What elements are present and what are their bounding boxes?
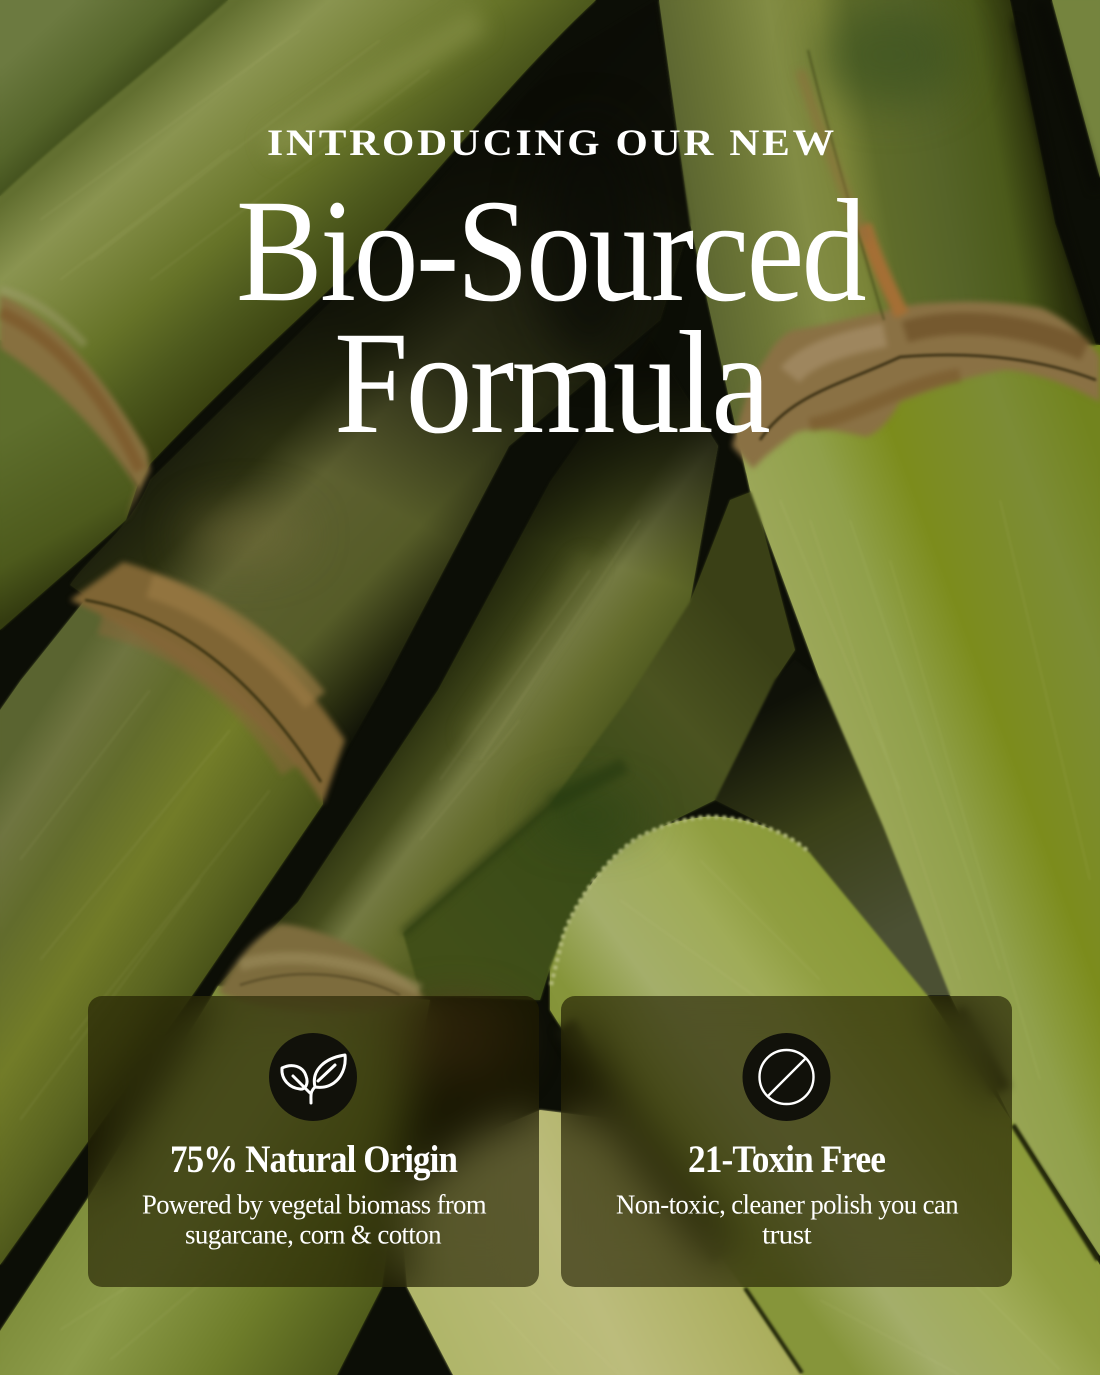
colour patches	[185, 5, 960, 1074]
card text: trust	[762, 1220, 812, 1250]
node: left centre	[70, 562, 345, 804]
title: Bio-Sourced Formula: Bio-Sourced	[236, 169, 865, 332]
shadow: mid cane top	[218, 340, 718, 996]
panel: 21-toxin free	[561, 996, 1012, 1287]
title: Bio-Sourced Formula	[236, 169, 865, 464]
cane: top-left corner	[0, 0, 228, 196]
cane: dark back	[715, 660, 950, 995]
cane: right large upper	[659, 0, 1100, 473]
cane: lower left	[0, 600, 323, 1265]
cane: mid light	[218, 340, 718, 996]
cane: front cut	[550, 817, 1100, 1375]
cane: top-left large	[0, 0, 596, 487]
title: Bio-Sourced Formula: Formula	[334, 301, 770, 464]
cane: mid right	[403, 491, 795, 1000]
highlights	[270, 20, 590, 740]
card text	[142, 1190, 487, 1250]
cane: bottom left	[0, 986, 430, 1375]
seam: thin dark lines	[745, 1125, 1098, 1373]
cane: top right corner	[1052, 0, 1100, 178]
card text: Non-toxic, cleaner polish you can	[616, 1190, 959, 1220]
shadow: upper centre cane	[70, 0, 690, 770]
cane: top-left below node	[0, 340, 137, 630]
node: upper left	[0, 290, 150, 520]
panel: 75% natural origin	[88, 996, 539, 1287]
node: right	[732, 225, 1100, 469]
flap: soft line	[800, 70, 868, 240]
icon: leaf sprout	[269, 1033, 357, 1121]
cane: bottom centre pale	[400, 1110, 803, 1375]
cut edge: scalloped rim	[551, 817, 810, 985]
cracks: thin node lines	[85, 50, 1096, 995]
icon: prohibited sign	[742, 1033, 830, 1121]
cane nodes	[0, 225, 1100, 1014]
card text: sugarcane, corn & cotton	[185, 1220, 442, 1250]
eyebrow: Introducing our new: INTRODUCING OUR NEW	[267, 123, 837, 164]
card heading: 75% Natural Origin	[170, 1138, 458, 1181]
cane: upper centre dark	[70, 0, 690, 770]
card heading: 21-Toxin Free	[688, 1138, 886, 1181]
shading: gaps and seams	[403, 4, 1096, 1255]
node: lower centre	[218, 924, 425, 1014]
card text: Powered by vegetal biomass from	[142, 1190, 487, 1220]
card text	[616, 1190, 959, 1250]
cane: right large lower	[740, 345, 1100, 1256]
